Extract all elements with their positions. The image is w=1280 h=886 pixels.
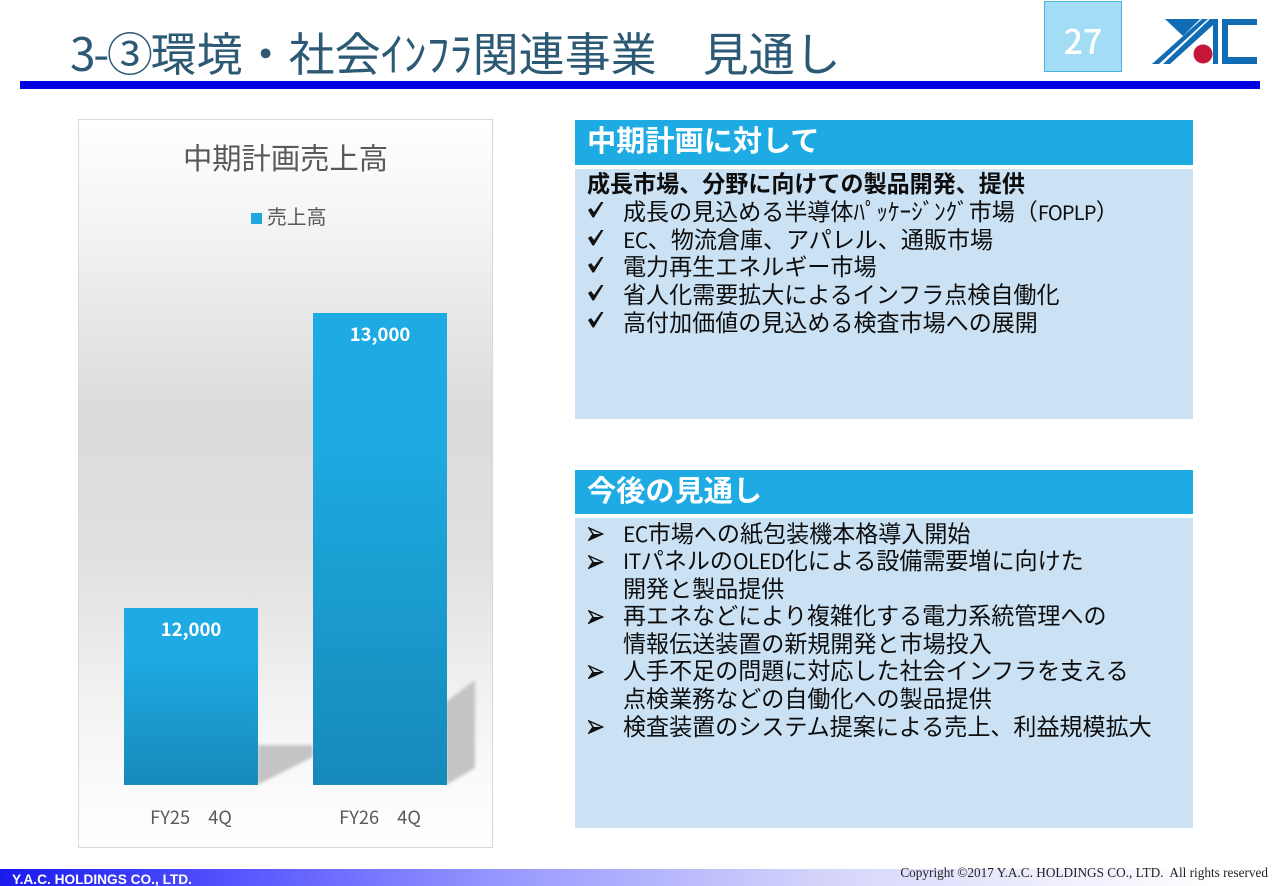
panel: outlook body [575, 518, 1193, 828]
arrow bullet 4 [588, 665, 604, 679]
heading: mid-term plan [575, 120, 1193, 165]
chart legend: 売上高 [267, 207, 326, 229]
heading: outlook: 今後の見通し [587, 476, 762, 508]
copyright: Copyright ©2017 Y.A.C. HOLDINGS CO., LTD. All rights reserved [900, 865, 1268, 880]
outlook item 2 continued: 開発と製品提供 [623, 576, 784, 602]
text block: mid-term plan lead: 成長市場、分野に向けての製品開発、提供 [587, 171, 1025, 197]
heading: outlook [575, 470, 1193, 514]
check mark 2 [588, 230, 604, 246]
icon: company logo [1152, 19, 1257, 64]
footer bar [0, 869, 1280, 886]
outlook item 3 continued: 情報伝送装置の新規開発と市場投入 [623, 631, 992, 657]
heading: mid-term plan: 中期計画に対して [587, 126, 820, 158]
outlook item 1: EC市場への紙包装機本格導入開始 [623, 519, 970, 549]
page number badge [1044, 1, 1122, 72]
bar: FY26 4Q [313, 313, 447, 785]
check mark 4 [588, 285, 604, 300]
arrow bullet 2 [588, 555, 604, 569]
panel: sales chart [78, 119, 493, 848]
outlook item 5: 検査装置のシステム提案による売上、利益規模拡大 [623, 714, 1152, 740]
list item 5: 高付加価値の見込める検査市場への展開 [623, 310, 1038, 336]
outlook item 2: ITパネルのOLED化による設備需要増に向けた [623, 546, 1084, 576]
value label: 13,000 [350, 321, 410, 347]
list item 2: EC、物流倉庫、アパレル、通販市場 [623, 225, 993, 255]
check mark 3 [588, 257, 604, 272]
title: 3-③環境・社会ｲﾝﾌﾗ関連事業 見通し [70, 19, 841, 85]
outlook item 4: 人手不足の問題に対応した社会インフラを支える [623, 658, 1129, 684]
axis label FY26: FY26 4Q [339, 804, 421, 830]
list item 4: 省人化需要拡大によるインフラ点検自働化 [623, 282, 1060, 308]
arrow bullet 1 [588, 527, 604, 541]
bar shadows [257, 680, 476, 786]
check mark 1 [588, 202, 604, 218]
title rule [20, 81, 1260, 89]
value label: 12,000 [161, 616, 221, 642]
bar: FY25 4Q [124, 608, 258, 785]
arrow bullet 3 [588, 610, 604, 624]
outlook item 3: 再エネなどにより複雑化する電力系統管理への [623, 603, 1107, 629]
list item 1: 成長の見込める半導体ﾊﾟｯｹｰｼﾞﾝｸﾞ市場（FOPLP） [623, 197, 1119, 226]
page number badge: 27 [1064, 15, 1102, 64]
axis label FY25: FY25 4Q [150, 804, 232, 830]
chart title: 中期計画売上高 [183, 143, 388, 176]
list item 3: 電力再生エネルギー市場 [623, 254, 877, 280]
panel: mid-term plan body [575, 169, 1193, 419]
outlook item 4 continued: 点検業務などの自働化への製品提供 [623, 686, 992, 712]
check mark 5 [588, 312, 604, 328]
arrow bullet 5 [588, 720, 604, 734]
